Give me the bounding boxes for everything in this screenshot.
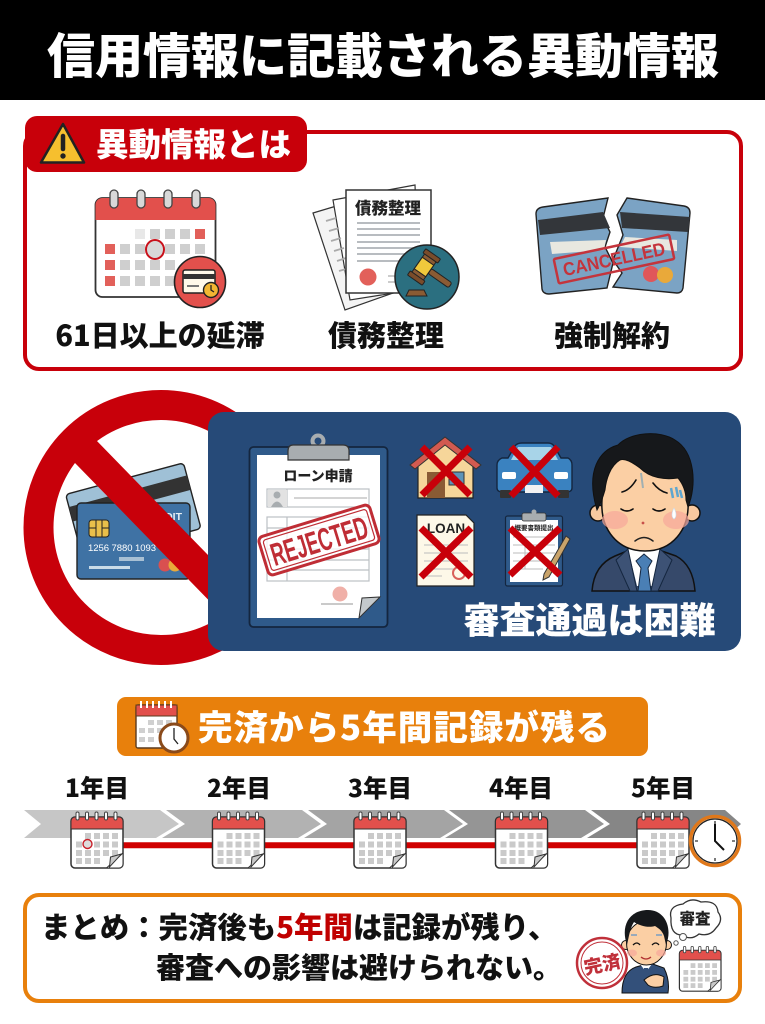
year 5	[631, 770, 695, 868]
label: 61 days overdue: 61日以上の延滞	[55, 313, 265, 355]
icon: calendar with card	[96, 190, 226, 308]
icon: crossed-out house	[410, 437, 481, 498]
icon: rejected loan application	[250, 436, 388, 627]
banner: records remain five years	[117, 697, 648, 756]
icon: broken cancelled credit card	[536, 198, 690, 294]
timeline red line	[120, 842, 645, 849]
year 2: 2年目	[207, 770, 271, 805]
panel: what is adverse information	[25, 116, 741, 369]
icon: broken cancelled credit card: CANCELLED	[561, 238, 667, 280]
title banner: 信用情報に記載される異動情報	[47, 17, 719, 87]
icon: debt documents with gavel	[313, 185, 459, 310]
banner text: 完済から5年間記録が残る	[198, 700, 610, 750]
title banner	[0, 0, 765, 100]
icon: credit cards: CREDIT	[143, 511, 183, 523]
timeline: five years	[24, 770, 741, 868]
timeline chevrons	[24, 810, 741, 838]
year 1	[65, 770, 129, 868]
year 3	[348, 770, 412, 868]
year 3: 3年目	[348, 770, 412, 805]
icon: relieved businessman	[622, 910, 672, 993]
year 5: 5年目	[631, 770, 695, 805]
icon: debt documents with gavel: 債務整理	[355, 195, 422, 219]
panel: summary	[25, 895, 740, 1001]
icon: calendar and clock	[136, 701, 188, 752]
year 4	[489, 770, 553, 868]
icon: crossed-out loan document: LOAN	[427, 521, 465, 536]
year 2	[207, 770, 271, 868]
year 4: 4年目	[489, 770, 553, 805]
icon: thought bubble: 審査	[679, 907, 711, 929]
icon: completed stamp	[577, 938, 627, 988]
icon: completed stamp: 完済	[581, 947, 623, 981]
icon: prohibition sign over credit cards	[38, 405, 284, 650]
summary text: 審査への影響は避けられない。	[156, 945, 562, 987]
label: forced cancellation: 強制解約	[554, 313, 670, 355]
panel heading text: 異動情報とは	[96, 119, 291, 166]
icon: small calendar	[679, 946, 721, 991]
icon: credit cards: 1256 7880 1093	[88, 543, 156, 554]
icon: rejected loan application: ローン申請	[283, 466, 353, 486]
panel caption: 審査通過は困難	[463, 592, 716, 644]
icon: crossed-out loan document	[417, 515, 474, 586]
year 1: 1年目	[65, 770, 129, 805]
summary text: まとめ：完済後も5年間は記録が残り、	[41, 905, 557, 947]
icon: crossed-out application form: 概要書類提出	[514, 522, 554, 532]
label: debt restructuring: 債務整理	[328, 313, 444, 355]
icon: credit cards	[66, 463, 201, 579]
panel: screening is difficult	[208, 412, 741, 651]
icon: clock	[690, 816, 740, 866]
icon: crossed-out application form	[506, 510, 570, 586]
icon: rejected loan application: REJECTED	[266, 509, 372, 573]
summary text	[41, 905, 562, 987]
icon: worried businessman	[590, 434, 700, 591]
panel heading tab	[25, 116, 307, 172]
icon: crossed-out car	[497, 443, 572, 498]
icon: warning triangle	[41, 124, 84, 162]
icon: thought bubble	[670, 900, 721, 945]
